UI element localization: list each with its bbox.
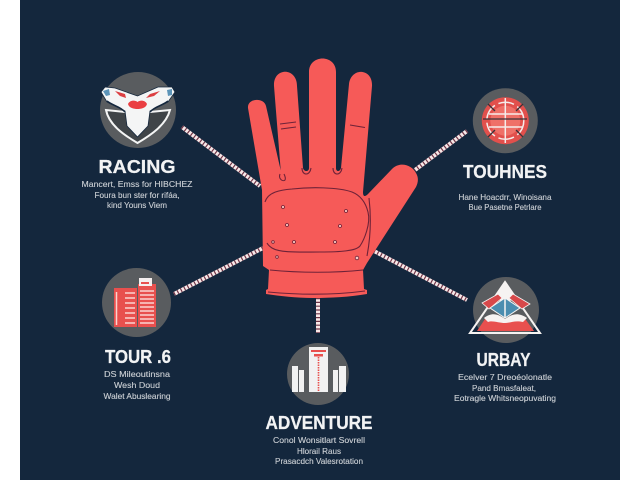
text: touring description: Bue Pasetne Petrlare [468, 203, 542, 212]
text: touring description: Hane Hoacdrr, Winoisana [458, 193, 552, 202]
heading: adventure: ADVENTURE [266, 413, 372, 433]
icon: racing mask [100, 72, 176, 148]
text: adventure description: Conol Wonsitlart Sovrell [273, 436, 365, 445]
connector: racing [182, 127, 260, 186]
heading: urban: URBAY [476, 350, 530, 370]
text: urban description: Pand Bmasfaleat, [472, 384, 536, 393]
text: racing description: Mancert, Emss for HIBCHEZ [82, 180, 193, 189]
text: tour description [104, 370, 171, 401]
text: urban description: Ecelver 7 Dreoéolonatle [458, 373, 553, 382]
icon: adventure towers [287, 343, 349, 405]
glove body [248, 58, 418, 298]
text: adventure description: Hlorail Raus [297, 447, 341, 456]
connector: adventure [316, 298, 320, 333]
glove stitching [265, 122, 370, 294]
panel: tour [102, 268, 171, 401]
icon: tour buildings [102, 268, 171, 337]
heading: racing: RACING [98, 157, 176, 177]
heading: touring: TOUHNES [463, 162, 547, 182]
icon: touring wheel [473, 88, 538, 153]
glove rivets [272, 206, 359, 260]
text: adventure description: Prasacdch Valesrotation [275, 457, 363, 466]
text: touring description [458, 193, 552, 212]
glove illustration [248, 58, 418, 298]
text: tour description: DS Mileoutinsna [104, 370, 171, 379]
connector: urban [374, 251, 467, 300]
text: urban description [454, 373, 556, 403]
panel: racing [82, 72, 193, 210]
text: racing description [82, 180, 193, 210]
panel: urban [454, 277, 556, 403]
text: racing description: Foura bun ster for rifáa, [94, 191, 180, 200]
text: adventure description [273, 436, 365, 466]
connector: touring [415, 131, 467, 170]
connector lines [174, 127, 467, 333]
icon: urban mountain [470, 277, 540, 343]
heading: tour: TOUR .6 [105, 347, 171, 367]
text: urban description: Eotragle Whitsneopuvating [454, 394, 556, 403]
panel: touring [458, 88, 552, 212]
connector: tour [174, 248, 263, 294]
panel: adventure [266, 343, 372, 466]
text: racing description: kind Youns Viem [107, 201, 167, 210]
text: tour description: Wesh Doud [114, 381, 160, 390]
text: tour description: Walet Abuslearing [104, 392, 170, 401]
